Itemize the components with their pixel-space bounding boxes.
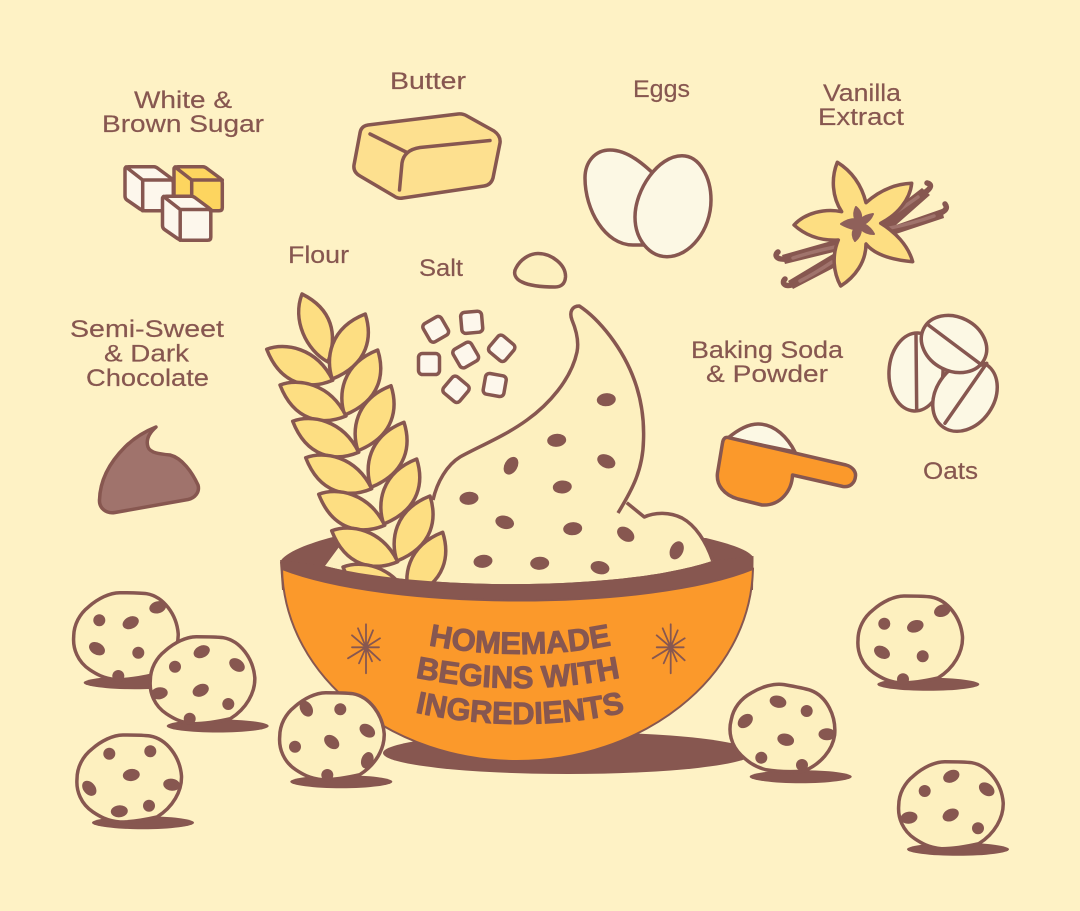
bowl front rim — [280, 556, 754, 601]
icon: salt crystals — [418, 311, 516, 404]
icon: small dough piece — [515, 254, 566, 287]
label: butter: Butter — [390, 68, 466, 95]
label: chocolate: Semi-Sweet — [70, 316, 224, 343]
label: baking soda and powder: & Powder — [706, 361, 828, 388]
icon: sugar cubes — [125, 167, 222, 240]
cookie: in front of bowl right — [724, 677, 852, 783]
icon: chocolate chip — [99, 427, 198, 513]
label: white and brown sugar: Brown Sugar — [102, 111, 264, 138]
label: vanilla extract — [818, 80, 904, 131]
dough with chocolate chips — [325, 306, 713, 584]
label: white and brown sugar — [102, 87, 264, 138]
bowl title: homemade begins with ingredients — [416, 624, 624, 725]
icon: measuring scoop — [717, 424, 856, 505]
label: vanilla extract: Extract — [818, 104, 904, 131]
label: baking soda and powder — [691, 337, 843, 388]
icon: wheat stalk — [267, 294, 446, 603]
bowl title: homemade begins with ingredients: INGREDIENTS — [416, 692, 624, 725]
label: chocolate — [70, 316, 224, 392]
label: white and brown sugar: White & — [134, 87, 232, 114]
label: eggs: Eggs — [633, 76, 690, 103]
cookie: lower left — [77, 735, 194, 829]
cookie: upper left — [74, 593, 178, 682]
bowl title: homemade begins with ingredients: HOMEMADE — [430, 624, 611, 655]
cookie: upper right — [858, 596, 979, 691]
cookie: in front of bowl left — [280, 693, 392, 788]
label: baking soda and powder: Baking Soda — [691, 337, 843, 364]
label: oats: Oats — [923, 458, 978, 485]
icon: eggs — [585, 150, 711, 257]
label: chocolate: Chocolate — [86, 365, 209, 392]
icon: butter — [354, 114, 500, 198]
label: chocolate: & Dark — [104, 340, 190, 368]
bowl title: homemade begins with ingredients: BEGINS WITH — [416, 656, 620, 689]
label: flour: Flour — [288, 242, 349, 269]
label: salt: Salt — [419, 255, 463, 282]
bowl back rim — [280, 537, 754, 590]
icon: vanilla flower and pods — [776, 162, 946, 289]
bowl shadow — [383, 732, 753, 774]
cookie: lower right — [899, 762, 1009, 856]
bowl body — [282, 569, 753, 761]
label: vanilla extract: Vanilla — [823, 80, 901, 107]
cookie: middle left — [150, 637, 269, 732]
icon: left starburst — [348, 624, 380, 673]
cookie shadow behind upper-left cookie — [84, 676, 186, 689]
icon: right starburst — [653, 624, 685, 673]
icon: oats — [887, 305, 1011, 444]
